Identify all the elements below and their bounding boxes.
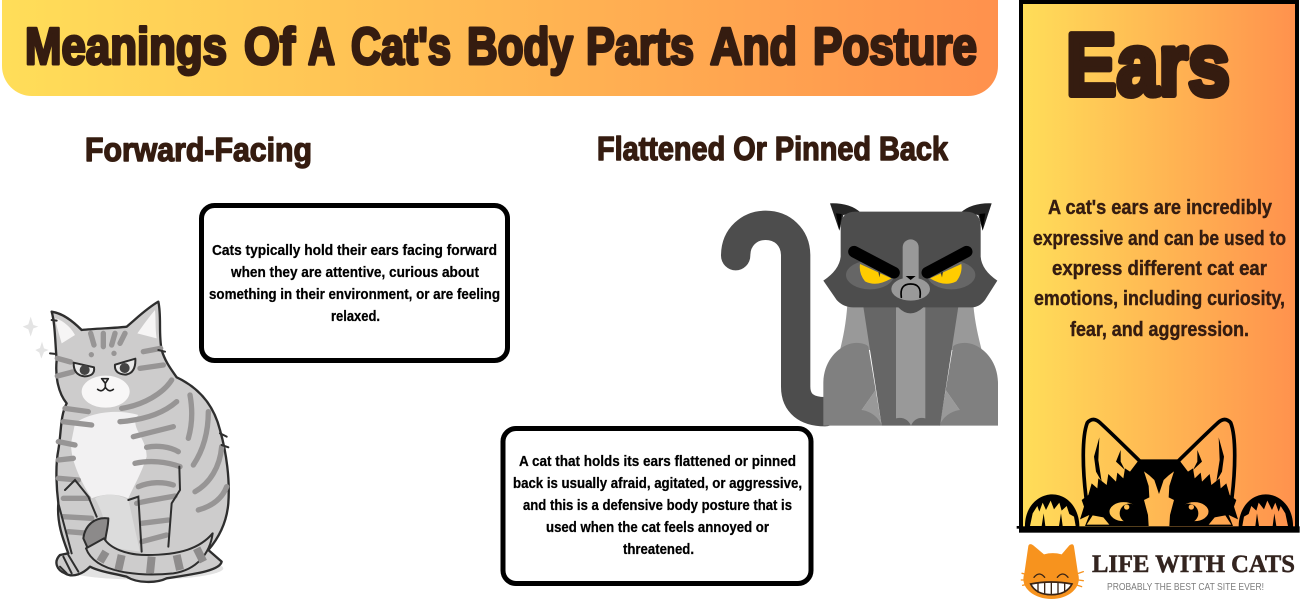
left paw xyxy=(1025,494,1079,528)
head xyxy=(823,212,997,313)
text box: forward-facing: something in their environment, or are feeling xyxy=(209,287,500,303)
illustration: dark grey angry cat with flattened ears xyxy=(736,203,998,426)
heading: forward-facing: Forward-Facing xyxy=(85,131,312,168)
text box: forward-facing: relaxed. xyxy=(331,309,380,325)
tail xyxy=(736,225,825,412)
side panel description: A cat's ears are incredibly xyxy=(1048,197,1273,219)
ears xyxy=(830,203,992,231)
title banner xyxy=(2,0,998,96)
text box: flattened ears: used when the cat feels annoyed or xyxy=(546,520,769,536)
side panel heading: Ears xyxy=(1066,15,1230,114)
illustration: black cat peeking over ledge xyxy=(1017,419,1300,533)
title: Of xyxy=(244,18,296,76)
side panel description: express different cat ear xyxy=(1052,258,1267,280)
title: A xyxy=(308,18,335,76)
heading: flattened or pinned back: Flattened Or Pinned Back xyxy=(597,130,949,167)
icon: smiling orange cat xyxy=(1021,544,1083,599)
muzzle and cheeks xyxy=(1087,471,1231,526)
ears xyxy=(1083,419,1235,497)
logo tagline: PROBABLY THE BEST CAT SITE EVER! xyxy=(1107,582,1264,593)
text box: forward-facing xyxy=(202,206,508,360)
text box: flattened ears: A cat that holds its ears flattened or pinned xyxy=(519,454,796,470)
text box: forward-facing: when they are attentive, curious about xyxy=(230,265,479,281)
text box: forward-facing: Cats typically hold their ears facing forward xyxy=(212,243,497,259)
illustration: grey tabby cat with forward-facing ears xyxy=(23,302,229,582)
title: Cat's xyxy=(351,18,451,76)
right paw xyxy=(1239,494,1293,528)
title: Body xyxy=(467,18,573,76)
title xyxy=(25,18,977,76)
logo name: LIFE WITH CATS xyxy=(1092,551,1295,578)
side panel description: fear, and aggression. xyxy=(1070,319,1249,341)
side panel: ears xyxy=(1021,2,1297,530)
side panel description xyxy=(1033,197,1286,341)
logo: life with cats xyxy=(1021,544,1295,599)
eyes xyxy=(1108,501,1139,523)
title: Meanings xyxy=(25,18,227,76)
head xyxy=(1080,459,1238,526)
text box: flattened ears xyxy=(503,428,811,584)
title: Posture xyxy=(813,18,977,76)
text box: flattened ears: threatened. xyxy=(623,542,694,558)
title: And xyxy=(710,18,797,76)
title: Parts xyxy=(586,18,694,76)
text box: flattened ears: and this is a defensive body posture that is xyxy=(523,498,792,514)
text box: flattened ears: back is usually afraid, agitated, or aggressive, xyxy=(513,476,802,492)
eyes xyxy=(74,359,135,376)
